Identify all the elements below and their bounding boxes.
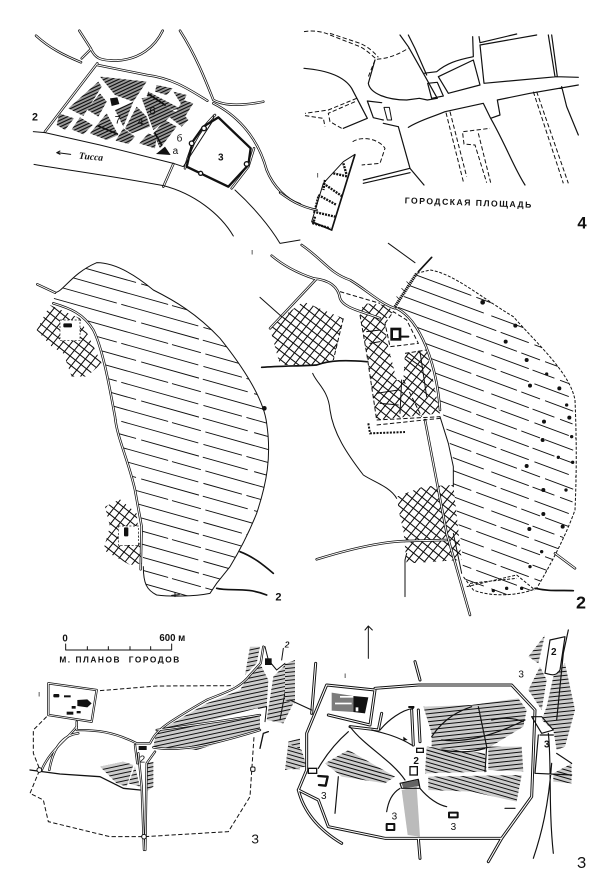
dashed outline xyxy=(417,270,576,595)
streets xyxy=(304,34,578,185)
north gate with ticks xyxy=(395,273,417,307)
scale bar xyxy=(59,633,185,665)
dotted suburb line xyxy=(368,423,405,433)
map labels: ı xyxy=(38,690,40,699)
map labels xyxy=(38,640,290,846)
inner streets xyxy=(290,630,572,858)
panel: town square plan xyxy=(280,31,587,232)
map labels: 6 xyxy=(149,106,156,118)
map labels: 2 xyxy=(284,640,290,649)
map labels: 3 xyxy=(218,153,224,164)
village dots xyxy=(480,300,574,592)
map labels: а xyxy=(173,146,179,157)
map labels: 2 xyxy=(140,755,146,766)
map labels: 3 xyxy=(544,739,550,750)
map labels: 2 xyxy=(284,640,290,649)
citadel building cutouts xyxy=(335,696,358,711)
map labels: З xyxy=(251,832,259,846)
map labels: ı xyxy=(344,671,346,680)
dashed town boundary xyxy=(30,686,254,837)
gatehouse xyxy=(265,658,272,665)
map labels: 2 xyxy=(551,647,557,658)
dashed town edges xyxy=(333,292,440,425)
citadel buildings xyxy=(53,694,92,715)
ring road xyxy=(298,662,535,862)
road along the west edge xyxy=(37,284,142,569)
map labels xyxy=(284,640,557,833)
map labels: 2 xyxy=(32,112,38,124)
castle xyxy=(392,329,408,339)
monuments xyxy=(308,706,458,830)
settlement grid south xyxy=(104,500,142,565)
scale bar: 0 xyxy=(62,634,68,645)
panel: right town plan with striped land xyxy=(251,243,586,622)
river name: Тисса xyxy=(78,151,104,164)
map labels: 3 xyxy=(451,822,457,833)
map labels: б xyxy=(177,133,183,145)
hatched quarters xyxy=(285,635,575,772)
diagonal hatched quarters xyxy=(285,744,572,802)
panel: left town plan with garden hatch xyxy=(36,262,282,600)
tail roads xyxy=(217,552,273,595)
panel: plan with ring road and north arrow xyxy=(285,626,586,868)
river banks and embankment xyxy=(33,115,300,243)
map labels: 3 xyxy=(392,811,398,822)
striped land area xyxy=(54,268,268,596)
scale bar: М. ПЛАНОВ ГОРОДОВ xyxy=(59,655,181,665)
hatched city blocks xyxy=(56,76,194,148)
square name: ГОРОДСКАЯ ПЛОЩАДЬ xyxy=(405,195,533,210)
dark buildings xyxy=(98,94,171,155)
monument symbol xyxy=(384,107,392,120)
panel: plan with scale bar xyxy=(30,623,303,850)
citadel interior xyxy=(332,693,368,713)
dashed former streets xyxy=(304,31,568,183)
small mark 1: ı xyxy=(251,248,253,257)
roads xyxy=(270,245,575,615)
map labels: 4 xyxy=(137,116,144,128)
gate markers xyxy=(37,767,255,839)
town square building xyxy=(139,746,147,750)
map labels: 2 xyxy=(413,756,419,767)
roads and citadel wall xyxy=(42,647,263,850)
map labels xyxy=(32,106,224,164)
dotted south quarter xyxy=(402,787,420,837)
triangular fortress plan: ı xyxy=(317,170,319,179)
settlement grid north xyxy=(36,305,102,377)
tower markers xyxy=(172,406,267,597)
figure number 4: 4 xyxy=(577,213,587,232)
hatched areas xyxy=(100,646,300,791)
scale bar: 600 м xyxy=(159,633,185,644)
citadel towers xyxy=(189,126,249,175)
thin streets and river xyxy=(260,243,462,597)
north arrow xyxy=(365,626,372,658)
citadel 3 xyxy=(187,117,251,187)
arrow: river flow xyxy=(57,151,71,154)
grid settlements xyxy=(264,290,470,563)
outline xyxy=(55,263,269,596)
figure number 3: З xyxy=(577,855,586,872)
map labels: 7 xyxy=(115,114,121,126)
figure mark 2: 2 xyxy=(275,592,281,604)
fortress streets and walls xyxy=(36,31,300,204)
map labels: 3 xyxy=(321,791,327,802)
panel: fortress plan on the river Tisza xyxy=(32,29,300,253)
striped land area xyxy=(398,274,576,595)
heavy road segments xyxy=(262,257,573,591)
figure number 2: 2 xyxy=(576,593,586,613)
lower road and side streets xyxy=(30,732,268,790)
map labels: 3 xyxy=(518,669,524,680)
triangular fortress plan xyxy=(280,154,355,230)
